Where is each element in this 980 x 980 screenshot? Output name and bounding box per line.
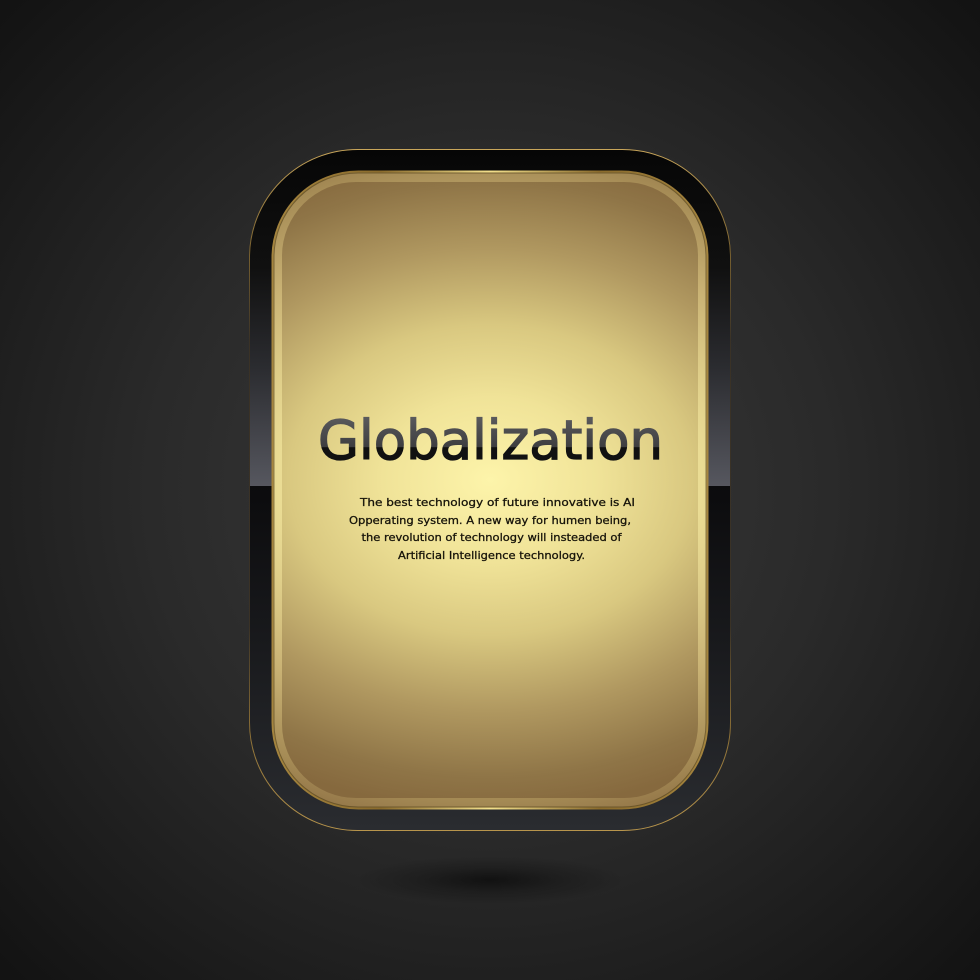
- description text: The best technology of future innovative is AI: [359, 496, 635, 509]
- badge: [250, 150, 730, 830]
- description text: the revolution of technology will insteaded of: [362, 531, 623, 544]
- gold panel: [282, 182, 698, 798]
- description text: Artificial Intelligence technology.: [398, 549, 585, 562]
- outer frame: lower band: [250, 486, 730, 746]
- inner highlight line: [274, 173, 706, 807]
- title: Globalization: [318, 409, 663, 472]
- description text: [349, 496, 635, 562]
- outer gold outline: [250, 150, 730, 830]
- outer frame: upper band: [250, 150, 730, 486]
- description text: Opperating system. A new way for humen being,: [349, 514, 631, 527]
- gold bevel ring: [272, 172, 708, 808]
- drop shadow: [355, 856, 625, 904]
